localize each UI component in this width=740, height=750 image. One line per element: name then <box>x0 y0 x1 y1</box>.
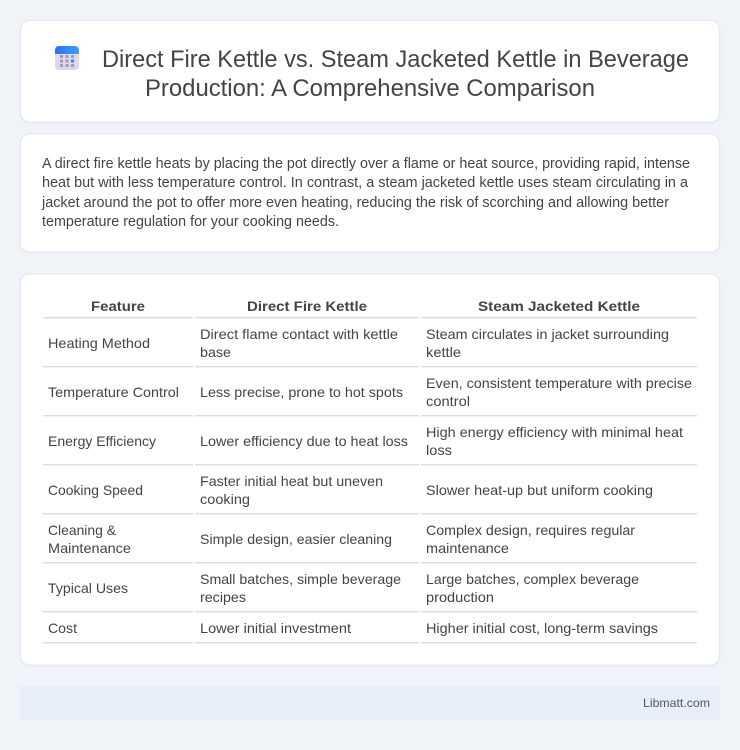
row: cleaning and maintenance: Cleaning & <box>48 522 117 538</box>
row: heating method <box>48 326 669 360</box>
row: heating method: kettle <box>426 344 461 360</box>
row: temperature control: Less precise, prone to hot spots <box>200 384 403 400</box>
text block: intro paragraph: heat but with less temperature control. In contrast, a steam jacketed kettle uses steam circulating in a <box>42 175 688 191</box>
row: heating method: base <box>200 344 231 360</box>
row: cleaning and maintenance: Complex design, requires regular <box>426 522 635 538</box>
row: typical uses: production <box>426 589 494 605</box>
row: typical uses: Small batches, simple beverage <box>200 571 401 587</box>
row: cooking speed: cooking <box>200 491 250 507</box>
row: temperature control: control <box>426 393 470 409</box>
text block: intro paragraph: jacket around the pot to offer more even heating, reducing the risk of scorching and allowing better <box>41 195 669 211</box>
row: energy efficiency: High energy efficiency with minimal heat <box>426 424 683 440</box>
table header row: Feature <box>91 298 145 314</box>
table header row: Steam Jacketed Kettle <box>478 298 640 314</box>
row: temperature control: Even, consistent temperature with precise <box>426 375 692 391</box>
row: cooking speed: Faster initial heat but uneven <box>200 473 383 489</box>
footer credit: Libmatt.com <box>643 696 710 710</box>
panel: title header <box>20 20 720 122</box>
footer <box>20 686 720 720</box>
row: cooking speed <box>48 473 653 507</box>
row: cost: Higher initial cost, long-term savings <box>426 620 658 636</box>
row: cooking speed: Slower heat-up but uniform cooking <box>426 482 653 498</box>
row: cooking speed: Cooking Speed <box>48 482 143 498</box>
row: heating method: Steam circulates in jacket surrounding <box>426 326 669 342</box>
icon: calendar <box>55 46 79 70</box>
row: cleaning and maintenance: maintenance <box>426 540 509 556</box>
table header row <box>91 298 640 314</box>
row: cleaning and maintenance: Simple design, easier cleaning <box>200 531 392 547</box>
row: typical uses: Typical Uses <box>48 580 128 596</box>
text block: intro paragraph <box>41 156 690 230</box>
title: Production: A Comprehensive Comparison <box>145 75 595 102</box>
table header row: Direct Fire Kettle <box>247 298 367 314</box>
row: energy efficiency: Energy Efficiency <box>48 433 156 449</box>
row: energy efficiency: Lower efficiency due to heat loss <box>200 433 408 449</box>
row: cleaning and maintenance: Maintenance <box>48 540 131 556</box>
title <box>102 46 689 102</box>
row: temperature control <box>48 375 692 409</box>
row: energy efficiency: loss <box>426 442 452 458</box>
row: cost: Lower initial investment <box>200 620 351 636</box>
row: cost: Cost <box>48 620 77 636</box>
row: energy efficiency <box>48 424 683 458</box>
text block: intro paragraph: A direct fire kettle heats by placing the pot directly over a flame or heat source, providing rapid, intense <box>42 156 690 172</box>
panel: comparison table <box>20 274 720 665</box>
panel: introduction <box>20 134 720 252</box>
row: cost <box>48 620 658 636</box>
row: heating method: Heating Method <box>48 335 150 351</box>
row: heating method: Direct flame contact with kettle <box>200 326 398 342</box>
row: typical uses <box>48 571 639 605</box>
row: temperature control: Temperature Control <box>48 384 179 400</box>
row: typical uses: recipes <box>200 589 246 605</box>
title: Direct Fire Kettle vs. Steam Jacketed Kettle in Beverage <box>102 46 689 73</box>
text block: intro paragraph: temperature regulation for your cooking needs. <box>42 214 339 230</box>
row: typical uses: Large batches, complex beverage <box>426 571 639 587</box>
row: cleaning and maintenance <box>48 522 635 556</box>
